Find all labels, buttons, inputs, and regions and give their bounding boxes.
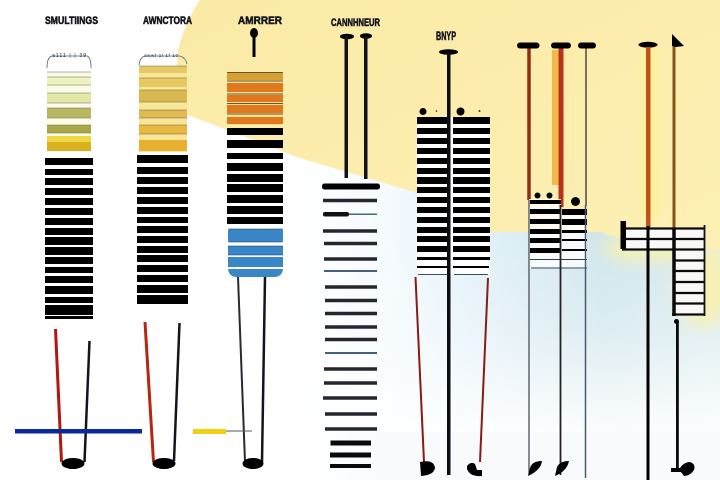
feet [528, 461, 569, 476]
bracket cap [139, 56, 187, 65]
column 5: twin ladder [416, 29, 490, 476]
scale label: a111 | | 39 [52, 53, 86, 59]
thin ticks [530, 260, 587, 268]
column 6: triple pins with block [517, 42, 596, 478]
centre pole [439, 49, 458, 475]
red lead [145, 322, 154, 462]
pale glow [640, 48, 660, 218]
thick and thin tick [323, 212, 377, 216]
thin bottom ticks [418, 274, 488, 276]
background: light blue wash [300, 150, 720, 480]
dark lead [84, 341, 90, 462]
long pole [646, 226, 650, 480]
lower poles [528, 200, 530, 475]
pin leads [527, 46, 531, 200]
scale label: awwt 1l 1f 10 [144, 53, 178, 58]
thin ticks [324, 271, 377, 353]
title: AMRRER [238, 15, 282, 27]
dots [534, 192, 580, 206]
right bars [562, 209, 587, 251]
background: yellow wedge [177, 0, 720, 250]
column 2: amber thermometer [137, 15, 192, 469]
orange bands [227, 72, 283, 125]
foot [671, 462, 694, 476]
foot [242, 458, 264, 469]
lower arrow lead [674, 319, 679, 471]
arrow lead [672, 40, 676, 232]
block backing [529, 199, 587, 269]
black bars [227, 128, 283, 224]
foot [62, 458, 84, 469]
dark lead [174, 323, 180, 461]
right lead [262, 277, 265, 462]
title: AWNCTORA [143, 15, 192, 27]
glow: yellow halo at right [602, 235, 720, 327]
title: BNYP [436, 29, 456, 43]
colour bands [47, 72, 91, 152]
pin caps [517, 42, 596, 48]
cap [638, 42, 658, 48]
top bar [322, 184, 380, 190]
title: SMULTIINGS [45, 15, 98, 27]
pin [250, 28, 258, 57]
column 3: orange and blue thermometer [193, 15, 283, 469]
ladder backing [417, 117, 490, 275]
table [620, 221, 705, 316]
blue cross line [15, 429, 142, 434]
left lead [238, 277, 245, 462]
right pin [360, 33, 372, 179]
scale lines [323, 200, 377, 429]
feet [420, 461, 482, 476]
title: CANNHNEUR [331, 17, 380, 29]
column 4: pins and scale [322, 17, 380, 468]
left lead [646, 47, 650, 227]
yellow marker [193, 429, 252, 434]
red lead [56, 329, 62, 462]
black bars [137, 155, 188, 304]
left bars [530, 200, 561, 253]
lower bars [330, 440, 371, 468]
bracket cap [47, 56, 91, 68]
foot [152, 458, 176, 469]
black bars [45, 158, 93, 319]
orange glow [552, 50, 559, 185]
left pin [340, 34, 354, 178]
arrow head [672, 34, 684, 47]
red leads [416, 277, 488, 462]
colour bands [139, 66, 187, 152]
column 1: yellow-green thermometer [15, 15, 142, 469]
black bars [417, 117, 490, 268]
dots [420, 108, 480, 116]
blue bands [228, 229, 283, 277]
column 7: arrow and table [620, 34, 705, 480]
